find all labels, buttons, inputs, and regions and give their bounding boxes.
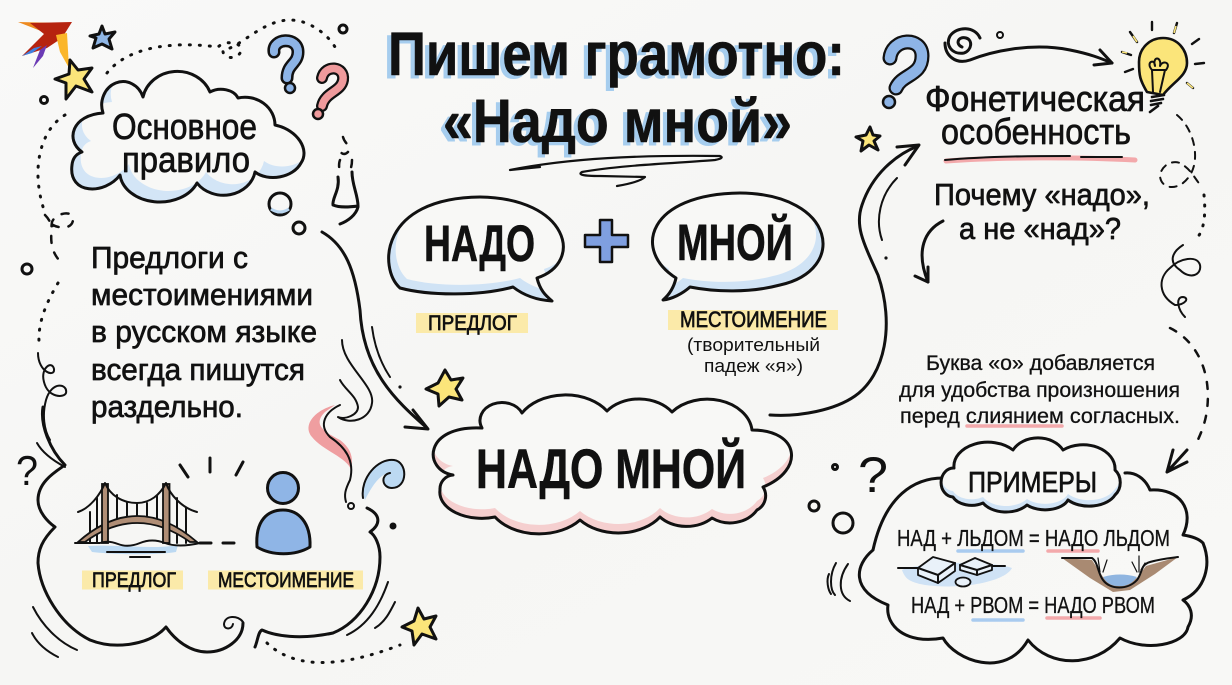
dashed trail mid-left [39,283,58,342]
rule text: местоимениями [91,277,313,312]
label: местоимение center: падеж «я») [704,356,803,376]
cloud: result [433,386,792,534]
arrow down right [1167,450,1187,472]
small arrow down [915,221,943,282]
star: yellow [55,60,92,99]
dot [390,522,396,530]
person icon [257,472,310,554]
cloud: examples title [941,432,1120,512]
cloud: main rule: правило [122,139,250,180]
heading: phonetic [925,78,1145,152]
explanation text: для удобства произношения [899,378,1180,402]
small circle [997,32,1003,38]
nose-like squiggle [333,137,358,224]
plus sign [585,220,628,262]
star: yellow bottom [402,608,436,645]
rule text: Предлоги с [91,240,248,275]
dotted trail top [107,20,335,73]
logo: swallow [18,22,72,68]
question mark: outline right: ? [858,447,888,503]
arrow to phonetic block [770,145,919,415]
question mark: pink [313,68,343,119]
label: местоимение: МЕСТОИМЕНИЕ [218,569,354,592]
question mark: small outline: ? [16,447,38,494]
label: местоимение center [668,307,838,376]
title: «Надо мной» [443,87,792,155]
motion lines right [828,563,850,601]
rule text: раздельно. [91,389,243,424]
icon: ice floes [898,557,1012,586]
dashed trail left [38,115,65,213]
pink underline [967,424,1062,428]
cloud: main rule [72,60,313,202]
question text: Почему «надо», [934,177,1150,212]
cloud: examples [859,473,1207,663]
attention rays [180,458,243,477]
question mark: big blue [883,42,922,108]
heading underline [945,156,1135,161]
dashed trail right [1160,115,1208,442]
bridge [75,483,200,557]
label: местоимение center: МЕСТОИМЕНИЕ [680,307,827,332]
icon: ditch [1062,556,1178,592]
cloud: result: НАДО МНОЙ [476,437,746,500]
rule text [91,240,317,424]
explanation text: перед слиянием согласных. [900,404,1180,428]
label: предлог center: ПРЕДЛОГ [428,312,517,335]
curl left [45,213,73,260]
cloud: left illustration [38,407,380,652]
explanation text: Буква «о» добавляется [926,351,1155,375]
spiral near cloud [224,617,243,628]
lightbulb icon [1122,22,1204,112]
star: small [856,127,880,151]
small circle [40,96,48,104]
question text: а не «над»? [959,211,1121,246]
pink swirl [309,405,354,509]
question text [934,177,1150,246]
title: Пишем грамотно: [388,20,845,88]
question mark: blue [274,41,298,93]
example 1: НАД + ЛЬДОМ = НАДО ЛЬДОМ [897,525,1170,551]
speech bubble: мной: МНОЙ [677,213,793,271]
dashed trail bottom [267,643,400,663]
blue swirl [363,460,404,500]
heading: phonetic: особенность [941,111,1131,152]
rule text: в русском языке [91,314,317,349]
dashed connector [200,542,246,544]
small circle [339,25,347,33]
title: «Надо мной» [439,90,788,158]
rule text: всегда пишутся [91,352,305,387]
label: предлог: ПРЕДЛОГ [92,569,176,592]
title underline [510,156,722,186]
explanation text [899,351,1180,428]
example 2: НАД + РВОМ = НАДО РВОМ [911,592,1155,618]
cloud: examples title: ПРИМЕРЫ [968,467,1097,499]
arrow to result [322,232,428,429]
title [384,20,845,158]
heading: phonetic: Фонетическая [925,78,1145,119]
motion lines left [32,443,395,657]
star: blue [90,26,115,49]
speech bubble: надо: НАДО [424,215,535,272]
small circle [22,264,32,274]
label: местоимение center: (творительный [687,335,820,355]
small circles right [809,464,853,533]
title: Пишем грамотно: [384,23,841,91]
cloud: main rule: Основное [112,106,257,147]
speech bubble: надо [389,188,570,301]
spiral arrow to bulb [945,29,1112,65]
bubbles of thought [269,193,305,234]
star: yellow center [426,370,463,406]
speech bubble: мной [646,184,823,300]
curl with loops [38,353,66,440]
